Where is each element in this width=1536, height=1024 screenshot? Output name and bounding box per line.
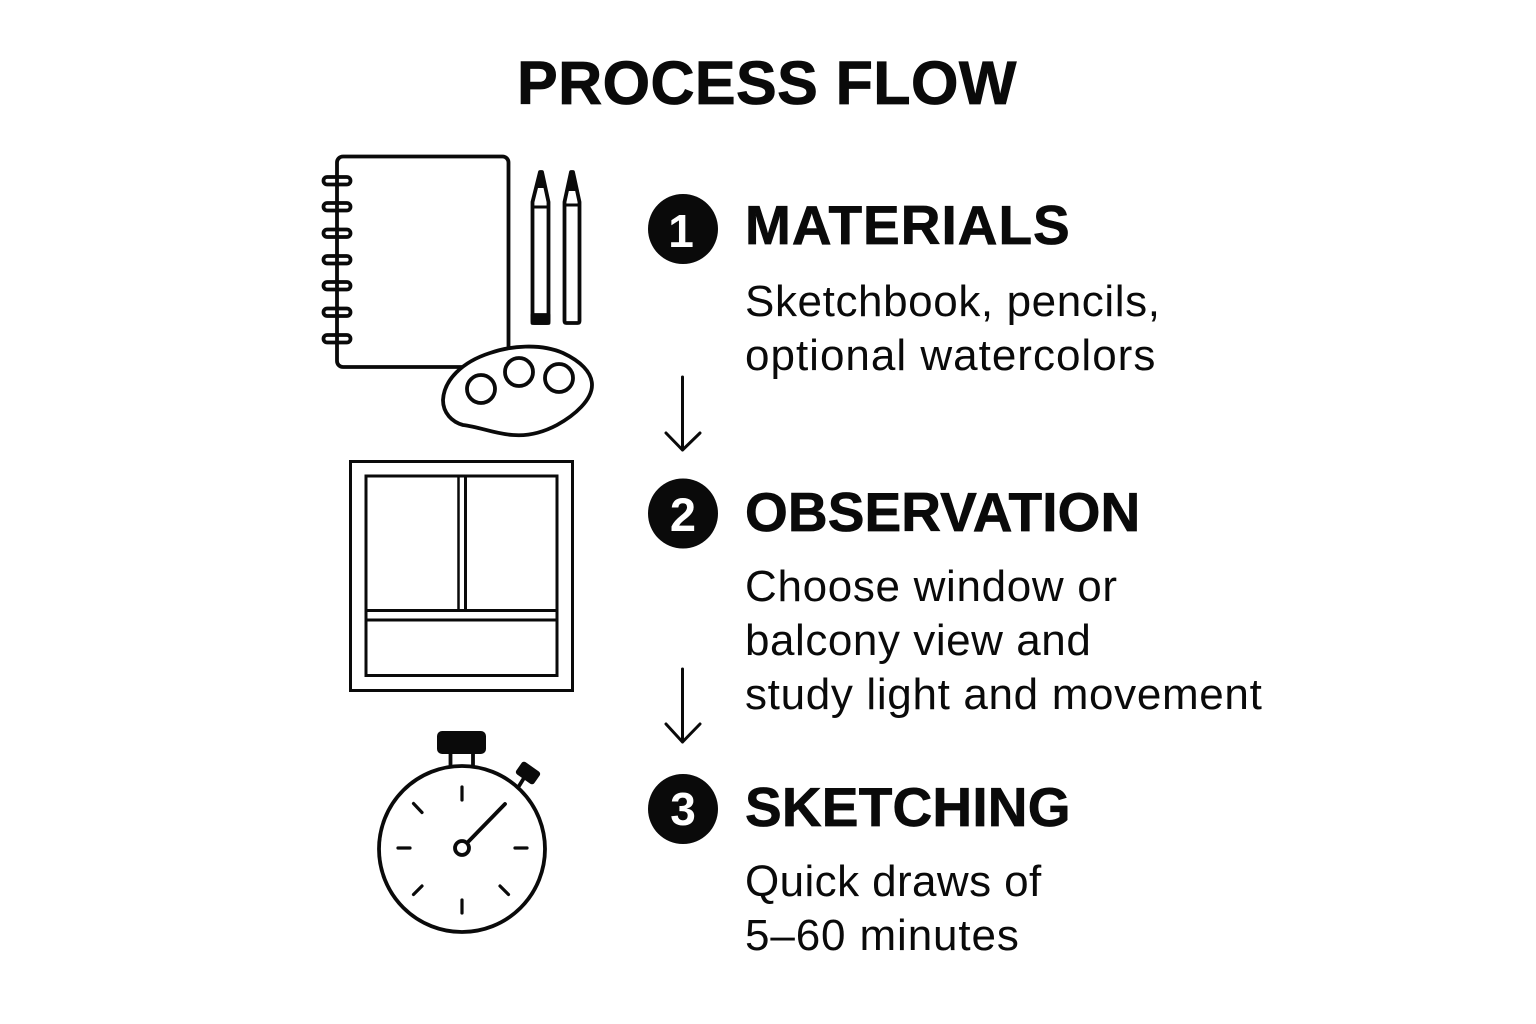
step 1 description bbox=[745, 277, 1161, 380]
step 2 description: balcony view and bbox=[745, 616, 1091, 665]
icon: window bbox=[350, 462, 572, 690]
step 3 description bbox=[745, 857, 1042, 960]
step 2 description: Choose window or bbox=[745, 562, 1118, 611]
step 1 description: Sketchbook, pencils, bbox=[745, 277, 1161, 326]
badge: step 3: 3 bbox=[670, 783, 696, 835]
arrow: observation to sketching bbox=[666, 669, 700, 742]
icon: watercolor palette bbox=[443, 347, 592, 435]
step 1 heading: MATERIALS bbox=[745, 194, 1071, 256]
step 2 description bbox=[745, 562, 1262, 719]
step 2 description: study light and movement bbox=[745, 670, 1262, 719]
arrow: materials to observation bbox=[666, 377, 700, 450]
step 3 description: 5–60 minutes bbox=[745, 911, 1020, 960]
badge: step 2: 2 bbox=[670, 488, 696, 541]
step 2 heading: OBSERVATION bbox=[745, 481, 1140, 543]
step 3 heading: SKETCHING bbox=[745, 776, 1071, 838]
icon: pencils bbox=[532, 170, 580, 323]
step 1 description: optional watercolors bbox=[745, 331, 1156, 380]
icon: sketchbook bbox=[324, 156, 508, 367]
badge: step 1: 1 bbox=[668, 205, 694, 257]
step 3 description: Quick draws of bbox=[745, 857, 1042, 906]
icon: stopwatch bbox=[379, 731, 545, 932]
title: PROCESS FLOW bbox=[517, 49, 1017, 117]
